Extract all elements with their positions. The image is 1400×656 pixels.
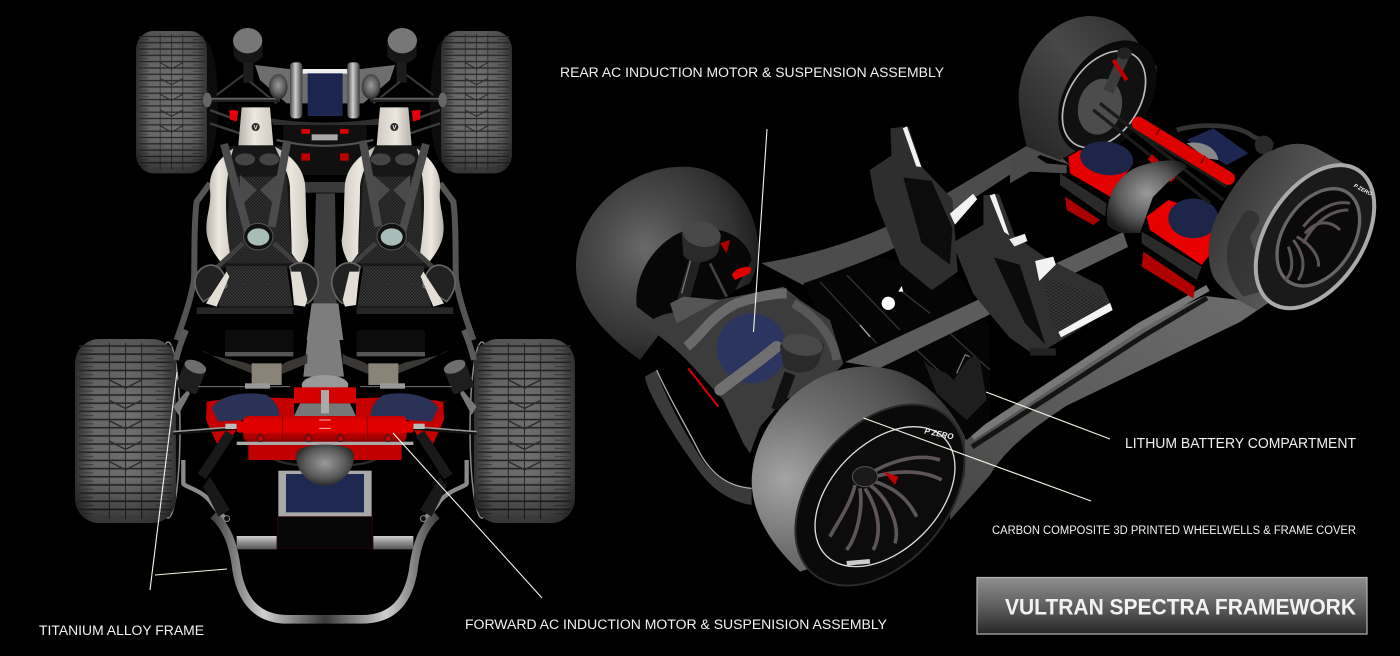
front wheel [752,367,999,618]
illustration: chassis top view [75,28,575,619]
title box: VULTRAN SPECTRA FRAMEWORK [1005,594,1357,620]
label: titanium frame: TITANIUM ALLOY FRAME [39,623,204,638]
illustration: chassis perspective view [576,16,1399,618]
forward motor and front hoop [173,330,477,619]
seat: rear perspective [870,126,977,290]
rear motor assembly [642,287,843,505]
red motor cylinder [237,416,413,442]
upper frame rail [761,138,1070,285]
rear-left wheel and damper [576,167,758,360]
frame cover and side rail [950,288,1268,520]
seat: left [195,107,318,314]
front wheel: P ZERO [924,426,955,442]
label: carbon composite: CARBON COMPOSITE 3D PRINTED WHEELWELLS & FRAME COVER [992,525,1356,537]
label: forward motor: FORWARD AC INDUCTION MOTOR & SUSPENISION ASSEMBLY [465,617,887,632]
battery compartment [803,257,990,440]
callout lines [150,129,1110,598]
red battery units [1010,103,1273,298]
frame rails and tunnel [177,183,473,340]
navy panel [277,471,373,548]
cross member [845,232,1128,368]
label: battery: LITHUM BATTERY COMPARTMENT [1125,436,1356,452]
right wheel [1209,144,1399,330]
label: rear motor: REAR AC INDUCTION MOTOR & SUSPENSION ASSEMBLY [560,65,944,80]
icon: left and right rear tyres [136,31,512,173]
title box [977,578,1367,634]
rear top wheel [1019,16,1177,173]
seat: front perspective [952,194,1113,356]
motor cover [1107,160,1187,233]
icon: left and right front tyres [75,339,575,523]
rear suspension assembly [203,28,447,193]
seat: right [332,107,455,314]
right wheel: P ZERO [1352,183,1373,198]
